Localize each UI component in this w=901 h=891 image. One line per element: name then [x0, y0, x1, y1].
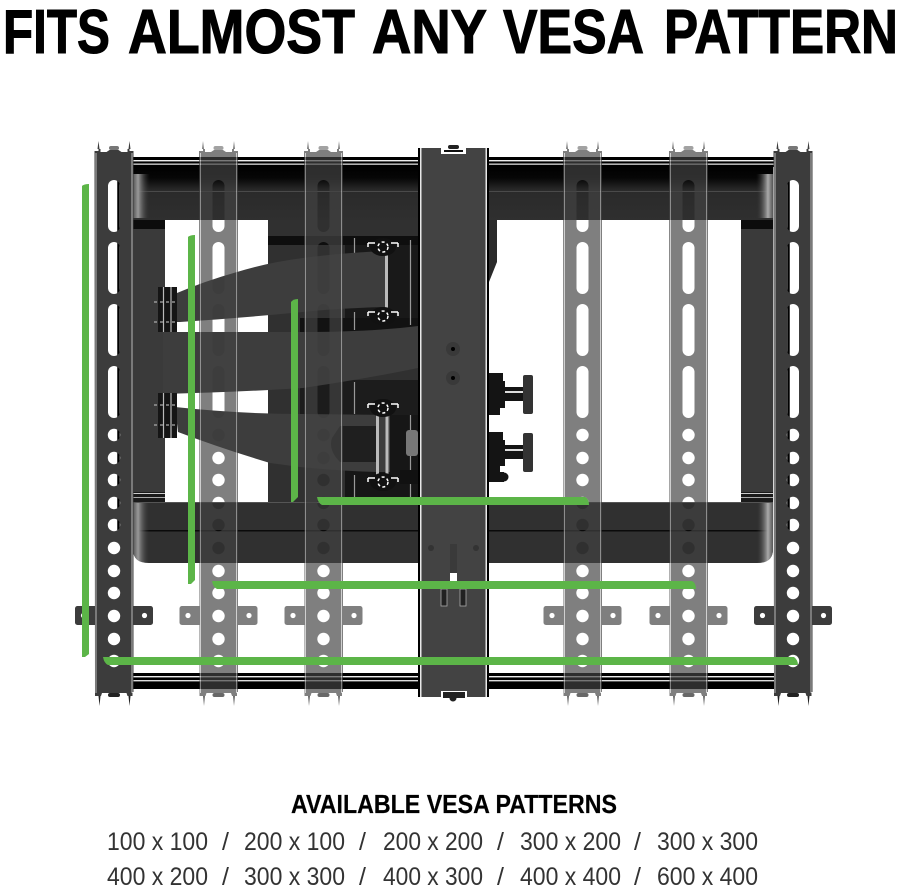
pattern list line 1: / — [497, 828, 504, 856]
center plate — [418, 145, 489, 702]
swing arms — [163, 251, 418, 472]
horizontal 700 — [103, 657, 798, 665]
top beam — [133, 166, 773, 220]
pattern list line 1: / — [222, 828, 229, 856]
bottom rail — [105, 673, 803, 689]
strip 4 — [544, 141, 622, 706]
pattern list line 2: / — [634, 863, 641, 891]
knob lower — [488, 432, 533, 482]
wall mount diagram — [75, 141, 832, 706]
pattern list line 1: 300 x 200 — [520, 828, 621, 856]
arm brackets — [154, 287, 177, 438]
hole shadows — [118, 180, 788, 530]
vertical 600 — [82, 184, 89, 657]
pattern list line 2: / — [497, 863, 504, 891]
lower arm — [175, 407, 390, 472]
vertical 400 — [188, 235, 195, 584]
pattern list line 1: 200 x 200 — [383, 828, 483, 856]
knob upper — [488, 373, 533, 415]
pattern list line 1: 100 x 100 — [107, 828, 208, 856]
vertical 200 — [291, 299, 298, 502]
pattern list line 1: 200 x 100 — [244, 828, 345, 856]
pattern list line 1: / — [634, 828, 641, 856]
pivot hinges — [368, 238, 418, 491]
horizontal 300 — [317, 497, 589, 505]
right rear tab — [489, 220, 497, 282]
pattern list line 2: / — [222, 863, 229, 891]
pattern list line 2: 300 x 300 — [244, 863, 345, 891]
right upright — [741, 220, 773, 502]
pattern list line 2: 400 x 200 — [107, 863, 208, 891]
strip 5 — [650, 141, 728, 706]
green measure lines — [82, 184, 798, 665]
strip 6 — [754, 141, 832, 706]
pattern list line 2: 400 x 300 — [383, 863, 483, 891]
pattern list line 1: 300 x 300 — [657, 828, 758, 856]
horizontal 500 — [212, 581, 696, 589]
pattern list line 2: / — [359, 863, 366, 891]
middle arm — [163, 326, 418, 394]
left upright — [133, 220, 165, 502]
bottom beam — [133, 502, 773, 563]
translucent strips — [180, 141, 728, 706]
strip 2 — [180, 141, 258, 706]
pattern list line 2: 600 x 400 — [657, 863, 758, 891]
top rail — [105, 157, 803, 167]
pattern list line 1: / — [359, 828, 366, 856]
strip 1 — [75, 141, 153, 706]
rear dark housing — [268, 220, 418, 502]
upper arm — [165, 251, 385, 322]
subheading: AVAILABLE VESA PATTERNS — [291, 789, 617, 819]
strip 3 — [284, 141, 362, 706]
pattern list line 2: 400 x 400 — [520, 863, 621, 891]
